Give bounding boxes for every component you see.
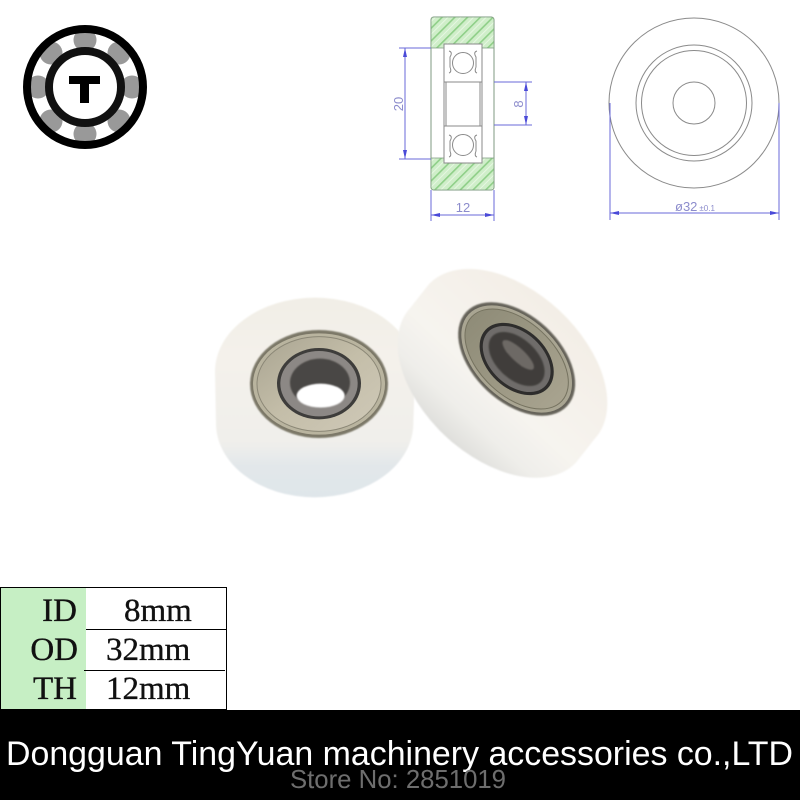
spec table: OD (30, 632, 78, 668)
spec table: 32mm (106, 632, 191, 668)
spec table: 8mm (124, 593, 192, 629)
footer bar: Dongguan TingYuan machinery accessories co.,LTD (6, 735, 793, 773)
cross-section technical drawing: 8 (511, 100, 526, 108)
footer bar: Store No: 2851019 (290, 764, 506, 794)
cross-section technical drawing (391, 17, 532, 221)
product photo: two white rollers with metal bearings (215, 233, 644, 513)
logo: bearing with T (26, 28, 144, 146)
spec table: 12mm (106, 671, 191, 707)
left roller (215, 298, 415, 497)
spec table: TH (33, 671, 77, 707)
cross-section technical drawing: 20 (391, 97, 406, 111)
right roller (361, 233, 644, 513)
spec table (0, 588, 226, 710)
footer bar (0, 710, 800, 800)
spec table: ID (42, 593, 77, 629)
front view technical drawing (609, 18, 779, 220)
front view technical drawing: ø32±0.1 (675, 199, 715, 214)
cross-section technical drawing: 12 (456, 200, 470, 215)
